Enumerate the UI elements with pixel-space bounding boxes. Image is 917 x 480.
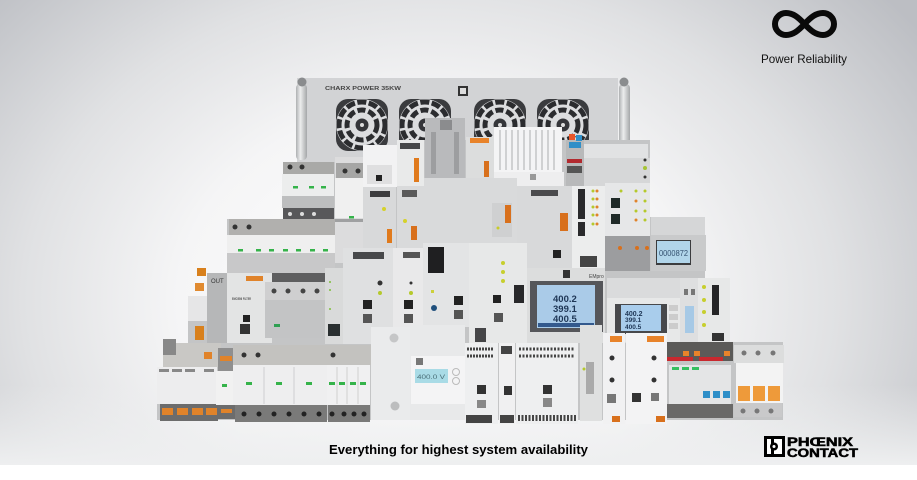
- transparent mount and energy meter: [371, 325, 465, 420]
- power supply panel with fans: [296, 78, 630, 168]
- EMpro meter large: 400.2: [553, 294, 577, 305]
- Phoenix Contact logo: CONTACT: [787, 448, 858, 460]
- power supply with connector: [517, 186, 572, 268]
- surge block and gateway: [265, 268, 343, 344]
- three-pole surge protector: [233, 345, 327, 422]
- bottom row surge modules left: [157, 339, 235, 421]
- big power supply panel: [424, 178, 517, 248]
- four-pole surge protector: [327, 345, 371, 422]
- surge protector upper left: [282, 162, 334, 219]
- Phoenix Contact logo: PHŒNIX: [787, 437, 853, 449]
- energy meter medium: 400.5: [625, 324, 642, 331]
- transparent mount and energy meter: 400.0 V: [417, 375, 445, 381]
- power supply with diagnostics: [469, 243, 527, 343]
- tall surge module: [335, 157, 363, 263]
- EMC filter: [227, 273, 272, 343]
- circuit breakers: [734, 345, 784, 417]
- wide surge protector: [227, 219, 335, 283]
- icon: infinity: [775, 13, 834, 35]
- energy meter medium: [607, 278, 680, 343]
- relay module red: [566, 134, 584, 186]
- EMpro meter large: EMpro: [589, 274, 604, 280]
- power modules upper row: [363, 140, 424, 251]
- EMpro meter large: 400.5: [553, 314, 577, 325]
- EMpro meter large: 399.1: [553, 304, 577, 315]
- energy meter small: [651, 217, 706, 271]
- thin module: [580, 325, 602, 421]
- IO module with status LEDs: [572, 186, 605, 271]
- EMC filter: EMC/EMI FILTER: [232, 297, 251, 301]
- energy meter medium: 400.2: [625, 311, 643, 318]
- left DIN modules: OUT: [211, 279, 224, 285]
- modular power supply with switch block: [423, 243, 469, 327]
- front power modules with orange terminals: [603, 333, 667, 424]
- grey bracket: [425, 118, 465, 178]
- power supply panel with fans: CHARX POWER 35KW: [325, 86, 401, 92]
- EMpro meter large: [527, 268, 605, 343]
- bottom power supplies: [465, 343, 578, 424]
- ethernet controller: [605, 183, 650, 271]
- product stack backing silhouette: [157, 140, 783, 420]
- orange connector module: [466, 137, 494, 179]
- energy meter medium: 399.1: [625, 317, 642, 324]
- Phoenix Contact logo: [764, 436, 858, 460]
- relay terminal row: [667, 342, 733, 418]
- energy meter small: 0000872: [659, 249, 689, 258]
- left DIN modules: [188, 268, 227, 343]
- grey controller top right: [584, 144, 650, 186]
- heat sink: [494, 127, 564, 186]
- middle power supplies: [343, 248, 423, 344]
- narrow meter and status module: [680, 278, 730, 343]
- tagline: Everything for highest system availability: [329, 442, 589, 457]
- label: Power Reliability: Power Reliability: [761, 52, 847, 66]
